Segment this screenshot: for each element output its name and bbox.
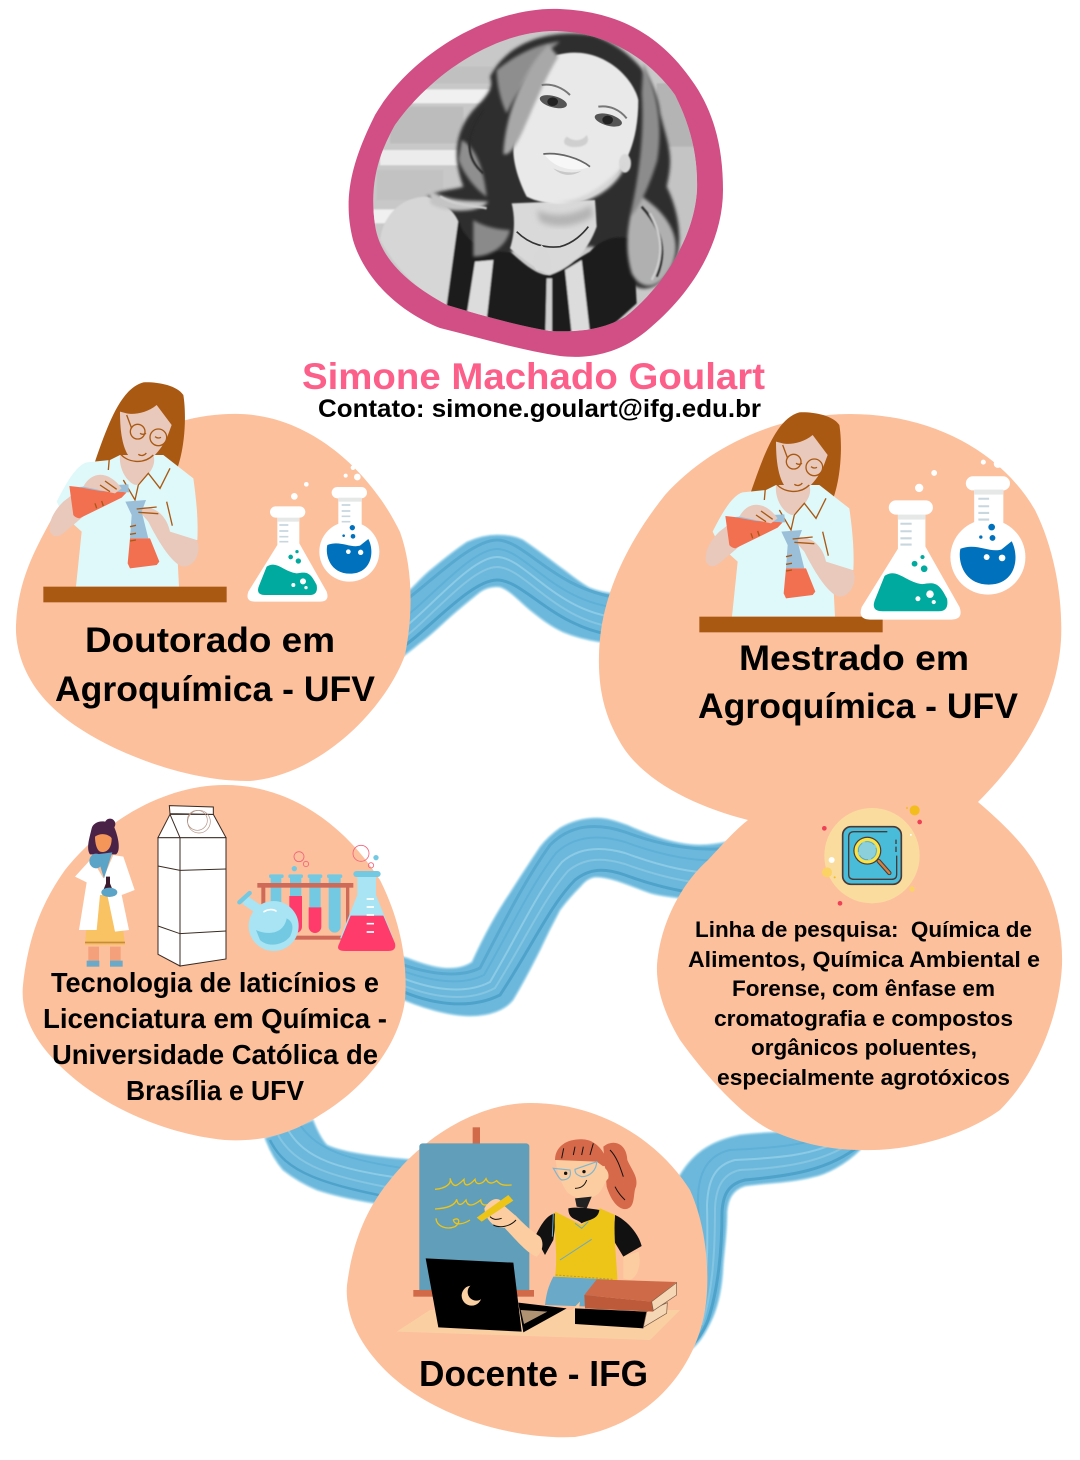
illustration: flasks bbox=[247, 465, 379, 602]
text block: tecnologia bbox=[43, 967, 387, 1106]
text block: linha de pesquisa: orgânicos poluentes, bbox=[751, 1035, 977, 1060]
text block: linha de pesquisa bbox=[688, 917, 1040, 1090]
panel: docente bbox=[347, 1103, 707, 1437]
panel: linha de pesquisa bbox=[657, 780, 1062, 1150]
text block: linha de pesquisa: Forense, com ênfase em bbox=[732, 976, 995, 1001]
heading: doutorado: Doutorado em bbox=[85, 621, 335, 660]
brush stroke: connector Doutorado to Mestrado bbox=[398, 535, 620, 660]
icon: magnifying glass bbox=[822, 805, 922, 906]
text block: tecnologia: Universidade Católica de bbox=[52, 1039, 378, 1070]
portrait photo: woman smiling in black and white bbox=[373, 31, 698, 332]
contact line: Contato: simone.goulart@ifg.edu.br bbox=[318, 395, 761, 423]
illustration: test tubes and flasks bbox=[239, 845, 395, 951]
illustration: milk carton bbox=[158, 806, 226, 966]
blob: linha de pesquisa background bbox=[657, 780, 1062, 1150]
blob: doutorado background bbox=[16, 414, 411, 781]
text block: tecnologia: Licenciatura em Química - bbox=[43, 1003, 387, 1034]
illustration: scientist in white coat bbox=[75, 819, 135, 967]
illustration: teacher at board with laptop and books bbox=[397, 1127, 680, 1340]
text block: linha de pesquisa: cromatografia e compostos bbox=[714, 1006, 1013, 1031]
brush stroke: connector Tecnologia to Docente bbox=[265, 1120, 415, 1208]
text block: tecnologia: Brasília e UFV bbox=[126, 1075, 305, 1106]
illustration: flasks bbox=[861, 449, 1025, 620]
text block: tecnologia: Tecnologia de laticínios e bbox=[51, 967, 379, 998]
brush stroke: connector Tecnologia to Linha de pesquisa bbox=[395, 818, 730, 1016]
blob: tecnologia background bbox=[23, 785, 406, 1140]
name heading: Simone Machado Goulart bbox=[302, 356, 765, 397]
illustration: scientist pouring beaker bbox=[699, 412, 883, 632]
illustration: scientist pouring beaker bbox=[43, 382, 227, 602]
blob: mestrado background bbox=[599, 414, 1061, 825]
text block: linha de pesquisa: Alimentos, Química Ambiental e bbox=[688, 947, 1040, 972]
panel: tecnologia de laticinios bbox=[23, 785, 406, 1140]
panel: doutorado bbox=[16, 382, 411, 781]
heading: mestrado: Mestrado em bbox=[739, 639, 969, 678]
neck shadow under jaw bbox=[537, 205, 593, 226]
text block: linha de pesquisa: especialmente agrotóxicos bbox=[717, 1065, 1010, 1090]
panel: mestrado bbox=[599, 412, 1061, 825]
heading: docente: Docente - IFG bbox=[419, 1353, 648, 1394]
text block: linha de pesquisa: Linha de pesquisa: Química de bbox=[695, 917, 1032, 942]
blob: docente background bbox=[347, 1103, 707, 1437]
brush stroke: connector Linha de pesquisa to Docente bbox=[678, 1130, 862, 1350]
portrait frame: pink blob bbox=[349, 9, 723, 357]
heading: doutorado line 2: Agroquímica - UFV bbox=[55, 670, 376, 709]
heading: mestrado line 2: Agroquímica - UFV bbox=[698, 687, 1019, 726]
